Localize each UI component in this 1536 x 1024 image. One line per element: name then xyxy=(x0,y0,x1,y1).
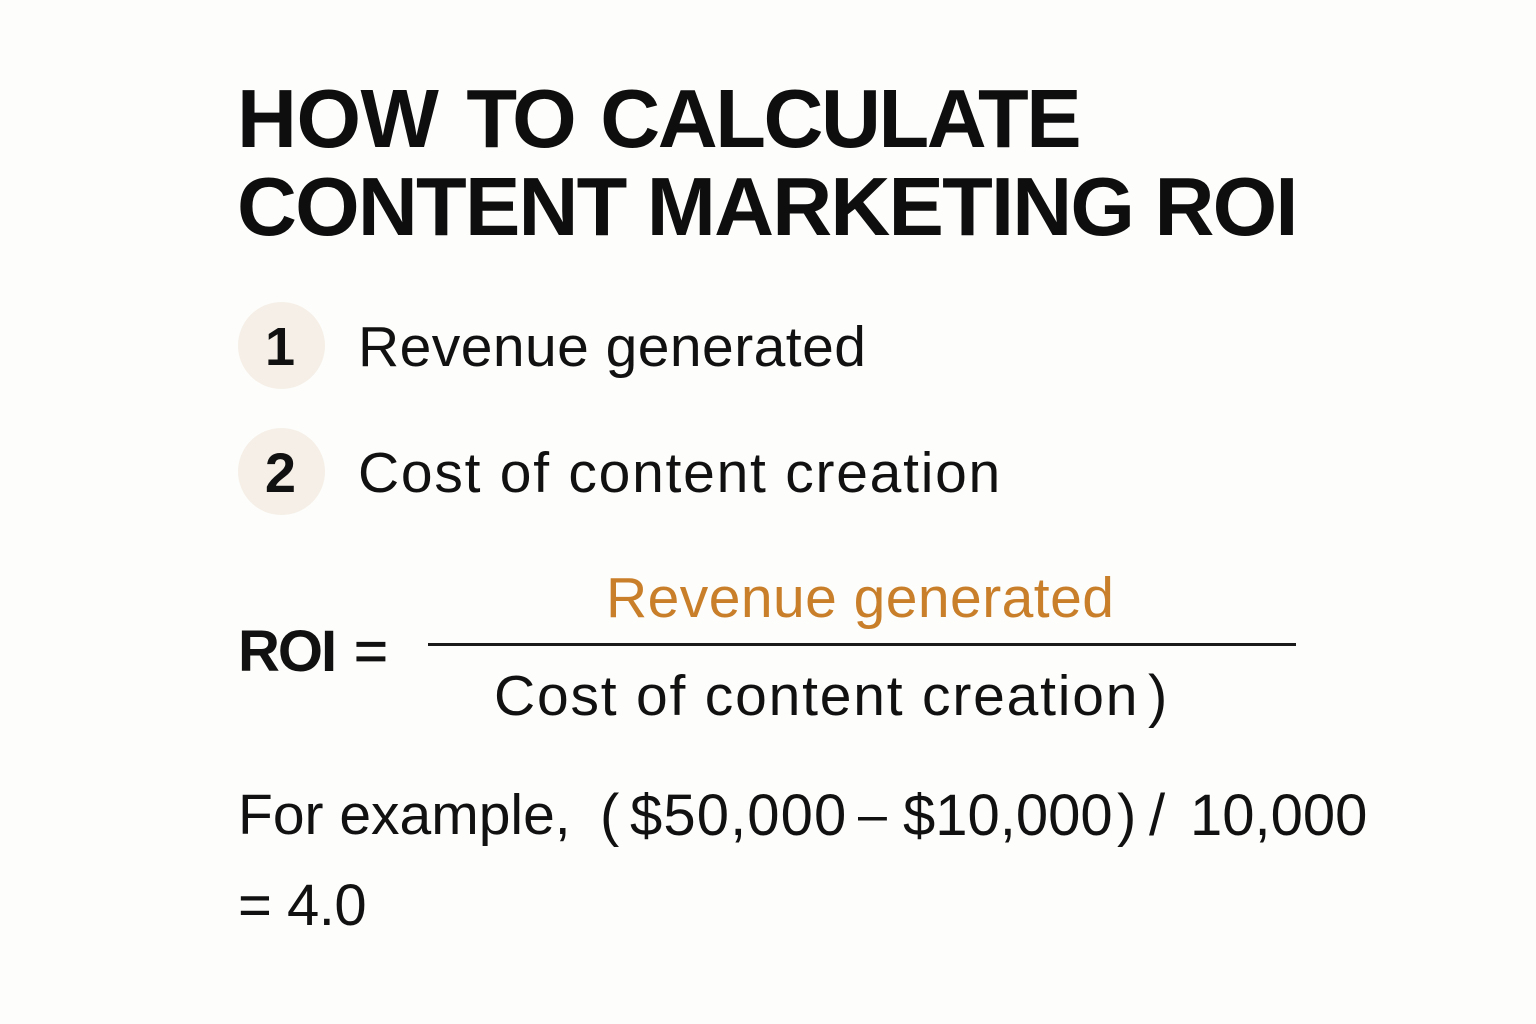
ROI label: ROI xyxy=(238,619,335,684)
step 1 badge xyxy=(238,302,325,389)
step 2 label: Cost of content creation xyxy=(358,441,1002,505)
step 2 badge: 2 xyxy=(265,441,296,504)
example line 1: $50,000 xyxy=(630,783,847,848)
step 1 badge: 1 xyxy=(265,317,295,377)
example line 1: / xyxy=(1149,783,1165,848)
formula divider xyxy=(428,643,1296,646)
example line 1: ) xyxy=(1117,783,1136,848)
step 2 xyxy=(238,428,1002,515)
formula denominator: ) xyxy=(1148,664,1167,729)
example line 2: = 4.0 xyxy=(238,873,366,938)
title: HOW TO CALCULATE xyxy=(237,72,1079,165)
ROI label: = xyxy=(354,619,388,684)
example line 1: ( xyxy=(600,783,619,848)
title: CONTENT MARKETING ROI xyxy=(237,160,1297,253)
title xyxy=(237,72,1297,253)
example line 1: 10,000 xyxy=(1190,783,1367,848)
example line 1: $10,000 xyxy=(903,783,1113,848)
example line 1: For example, xyxy=(238,783,571,847)
step 1 label: Revenue generated xyxy=(358,315,866,379)
example line 1 xyxy=(238,783,1367,848)
step 2 badge xyxy=(238,428,325,515)
step 1 xyxy=(238,302,866,389)
formula numerator: Revenue generated xyxy=(606,566,1114,630)
ROI label xyxy=(238,619,388,684)
example line 1: – xyxy=(858,786,887,844)
formula denominator: Cost of content creation xyxy=(494,664,1139,728)
